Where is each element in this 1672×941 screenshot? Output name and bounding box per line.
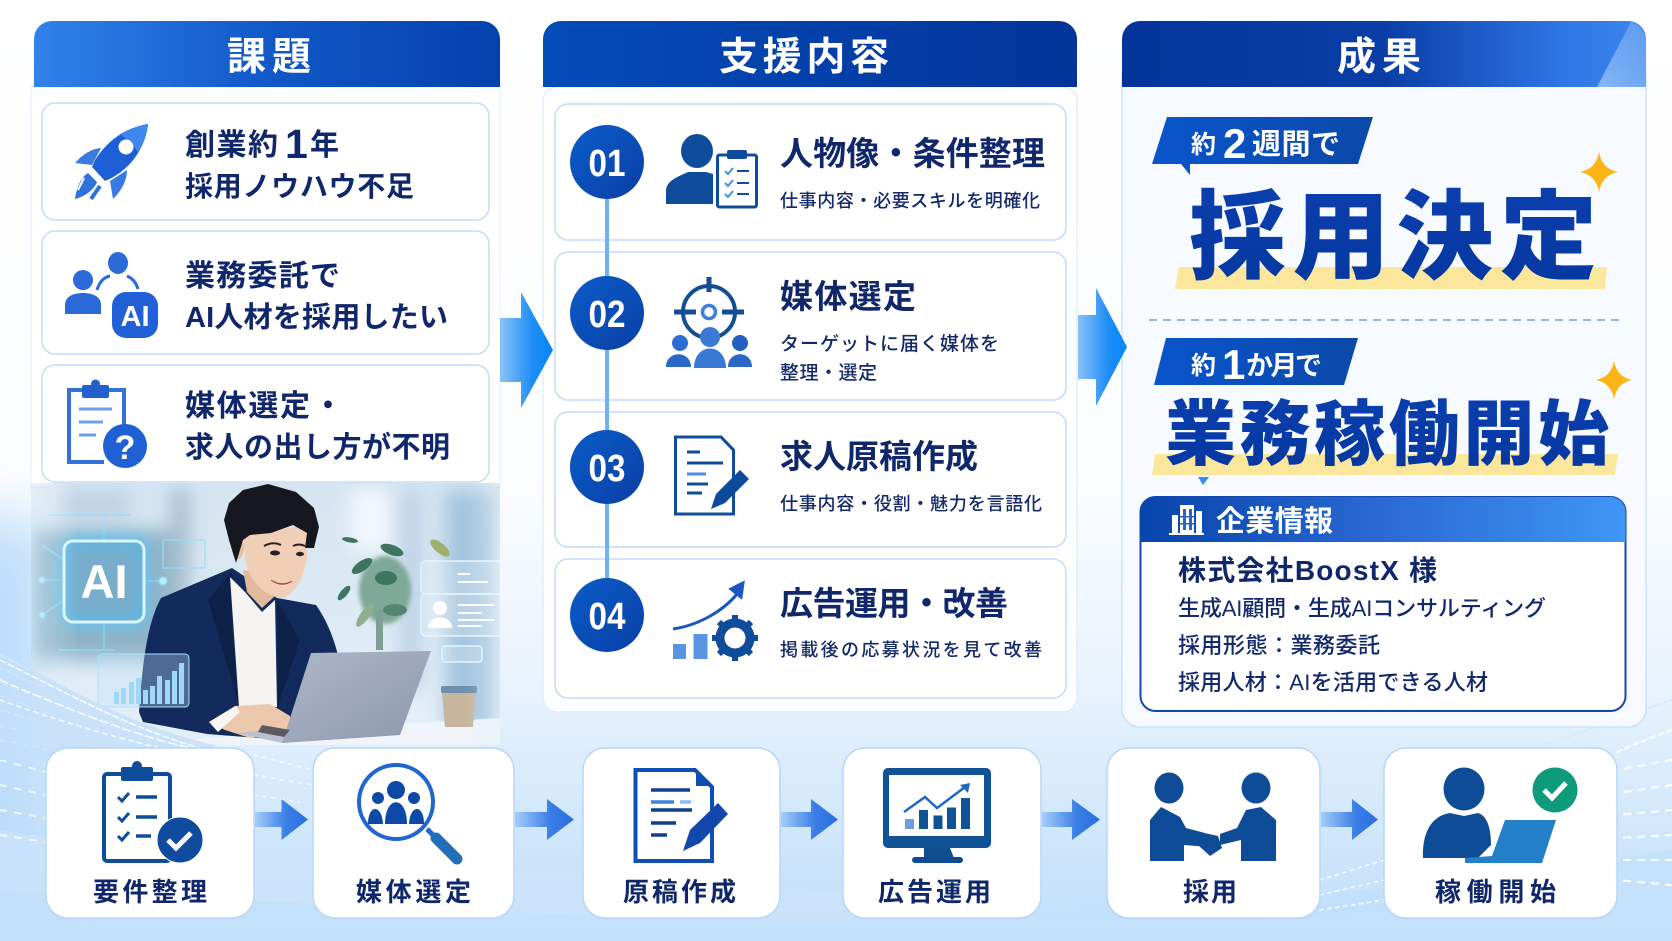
company details: 採用形態：業務委託	[1178, 633, 1380, 658]
icon: handshake	[1150, 772, 1276, 861]
panel body	[543, 87, 1077, 712]
step 02 card	[555, 252, 1066, 400]
card: 創業約1年	[42, 103, 489, 220]
card: 媒体選定・	[42, 365, 489, 482]
text: ・	[313, 390, 343, 423]
icon: people and AI badge	[65, 252, 158, 338]
highlight	[1152, 454, 1618, 475]
flow step: 要件整理	[46, 748, 254, 918]
company info box	[1140, 497, 1626, 711]
sparkle	[1580, 152, 1618, 192]
icon: person with checklist	[666, 134, 756, 207]
text	[185, 121, 414, 202]
panel: 課題	[0, 21, 506, 760]
flow step: 広告運用	[843, 748, 1041, 918]
text: 人物像・条件整理	[780, 135, 1045, 172]
laptop	[236, 651, 431, 743]
header: 課題	[34, 21, 500, 87]
flow step: 原稿作成	[583, 748, 780, 918]
AI chip graphic	[39, 515, 205, 650]
header: 支援内容	[543, 21, 1077, 87]
big text: 採用決定: 採用決定	[1189, 183, 1597, 292]
photo: man working on laptop with AI overlays	[31, 483, 506, 760]
icon: people and AI badge: AI	[120, 301, 150, 333]
icon: building	[1169, 505, 1204, 535]
sparkle	[1596, 361, 1632, 399]
wave over photo	[0, 652, 214, 760]
arrow	[1042, 799, 1100, 840]
text: 求人の出し方が不明	[185, 430, 450, 464]
header: 支援内容: 支援内容	[719, 36, 889, 79]
number 03: 03	[588, 448, 626, 490]
label: 原稿作成	[623, 877, 736, 907]
text	[185, 260, 448, 334]
result 1: 約2週間で	[1152, 117, 1618, 292]
text: 年	[310, 129, 339, 162]
panel body	[1122, 60, 1646, 727]
arrow	[1321, 799, 1378, 840]
timeline connector	[605, 162, 609, 615]
text: 整理・選定	[780, 362, 877, 384]
dashed divider	[1149, 319, 1620, 321]
arrow	[255, 799, 308, 840]
ribbon	[1154, 338, 1358, 385]
company info header: 企業情報	[1216, 505, 1333, 538]
text	[780, 438, 1042, 514]
header: 成果: 成果	[1337, 36, 1421, 79]
flow step: 媒体選定	[313, 748, 514, 918]
result 1: 約2週間で: 週間で	[1252, 129, 1340, 161]
text: 仕事内容・必要スキルを明確化	[780, 191, 1040, 211]
company details: 株式会社BoostX 様	[1178, 555, 1437, 586]
highlight	[1175, 267, 1607, 289]
big text: 業務稼働開始: 業務稼働開始	[1165, 396, 1609, 475]
panel: 成果	[1122, 21, 1646, 727]
text: AI人材を採用したい	[185, 301, 448, 334]
label: 媒体選定	[356, 877, 471, 907]
company details: 採用人材：AIを活用できる人材	[1178, 670, 1488, 695]
text: ターゲットに届く媒体を	[780, 333, 999, 355]
step 03 card	[555, 412, 1066, 547]
icon: monitor with chart	[883, 768, 991, 863]
text	[780, 278, 999, 384]
pointer	[1198, 477, 1209, 485]
company details: 生成AI顧問・生成AIコンサルティング	[1178, 596, 1546, 621]
company info header	[1140, 497, 1626, 542]
result 2: 約1か月で: 約	[1191, 352, 1216, 380]
text: 仕事内容・役割・魅力を言語化	[780, 494, 1042, 514]
panel body	[31, 87, 500, 487]
wave texture: left	[0, 655, 313, 842]
step 04 card	[555, 559, 1066, 698]
person	[139, 484, 338, 740]
wave texture: right	[1320, 700, 1672, 910]
arrow: 支援内容 to 成果	[1078, 288, 1127, 406]
icon: growth chart and gear	[673, 582, 758, 661]
icon: clipboard with question mark: ?	[115, 429, 135, 467]
company details	[1178, 555, 1546, 695]
result 1: 約2週間で: 2	[1223, 120, 1246, 167]
result 2: 約1か月で	[1152, 338, 1632, 485]
result 2: 約1か月で: か月で	[1246, 351, 1322, 381]
result 1: 約2週間で: 約	[1191, 131, 1216, 159]
arrow	[781, 799, 838, 840]
icon: rocket	[75, 124, 148, 199]
icon: person with laptop and check	[1423, 768, 1578, 863]
flow step: 稼働開始	[1384, 748, 1617, 918]
result 2: 約1か月で: 1	[1222, 341, 1245, 388]
small chart overlay	[98, 654, 189, 707]
text	[780, 135, 1045, 211]
text	[185, 390, 450, 464]
panel: 支援内容	[543, 21, 1077, 712]
icon: document with pen	[636, 770, 728, 861]
header: 課題: 課題	[227, 36, 311, 79]
text: 媒体選定	[185, 390, 310, 423]
header: 成果	[1122, 21, 1646, 87]
text: 1	[285, 121, 308, 167]
ribbon	[1152, 117, 1373, 175]
step 01 card	[555, 104, 1066, 240]
AI chip graphic: AI	[80, 555, 128, 608]
icon: magnifier with people	[359, 765, 457, 859]
desk	[196, 718, 500, 745]
label: 採用	[1183, 877, 1237, 907]
icon: clipboard with question mark	[69, 380, 147, 468]
coffee cup	[441, 686, 477, 727]
text: 求人原稿作成	[780, 438, 978, 475]
arrow	[515, 799, 574, 840]
number 02	[570, 276, 644, 350]
number 04	[570, 578, 644, 652]
text: 媒体選定	[780, 278, 916, 315]
number 03	[570, 430, 644, 504]
text: 掲載後の応募状況を見て改善	[780, 640, 1042, 660]
label: 広告運用	[878, 877, 991, 907]
label: 要件整理	[93, 877, 207, 907]
number 02: 02	[588, 294, 626, 336]
number 01: 01	[588, 143, 626, 185]
text: 広告運用・改善	[780, 585, 1008, 622]
text: 創業約	[185, 129, 278, 162]
text: 採用ノウハウ不足	[185, 171, 414, 202]
number 04: 04	[588, 596, 626, 638]
arrow: 課題 to 支援内容	[500, 292, 553, 408]
label: 稼働開始	[1435, 877, 1556, 907]
plant	[336, 536, 452, 650]
card: 業務委託で	[42, 231, 489, 354]
text: 業務委託で	[185, 260, 340, 293]
number 01	[570, 125, 644, 199]
icon: checklist clipboard	[104, 761, 203, 863]
flow step: 採用	[1107, 748, 1320, 918]
text	[780, 585, 1042, 660]
right floating UI cards	[421, 561, 506, 662]
icon: target and people	[666, 277, 752, 368]
icon: document with pen	[676, 437, 749, 514]
